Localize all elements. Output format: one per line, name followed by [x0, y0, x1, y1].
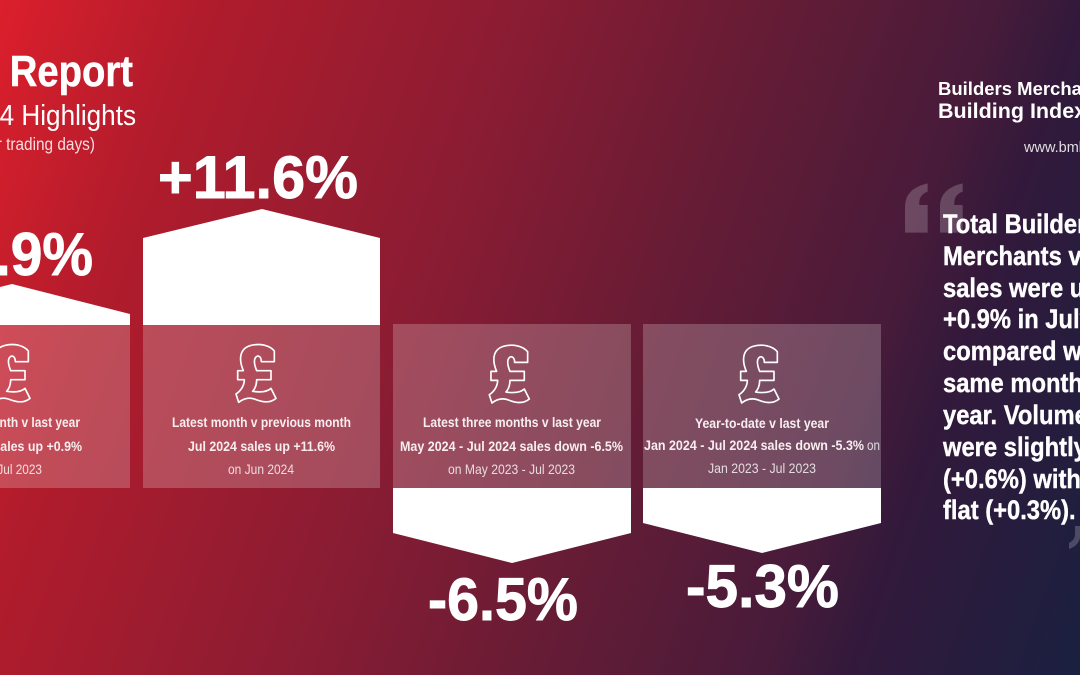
logo: builders merchants building index	[938, 78, 1080, 156]
card text: Latest three months v last year	[423, 414, 601, 430]
value: -6.5%: -6.5%	[428, 566, 578, 633]
value: -5.3%: -5.3%	[686, 553, 839, 620]
card text: on Jun 2024	[228, 461, 294, 477]
icon: pound	[739, 345, 779, 403]
card text	[400, 414, 623, 477]
up arrow shape	[0, 284, 130, 325]
card text	[0, 414, 82, 477]
icon: pound	[236, 345, 276, 402]
card text: on	[867, 437, 880, 453]
panel: year-to-date v last year	[643, 324, 881, 620]
card text: on May 2023 - Jul 2023	[448, 461, 575, 477]
card background	[143, 325, 380, 488]
icon: pound	[489, 345, 529, 403]
card text: Jan 2024 - Jul 2024 sales down -5.3%	[644, 437, 864, 453]
card text	[172, 414, 351, 477]
card text: Year-to-date v last year	[695, 415, 829, 431]
quote text: flat (+0.3%).	[943, 496, 1076, 525]
panel: latest three months v last year	[393, 324, 631, 633]
card background	[393, 324, 631, 488]
panel: latest month v previous month	[143, 144, 380, 488]
icon: opening quote mark	[905, 183, 963, 233]
card text: Jul 2024 sales up +11.6%	[188, 438, 335, 454]
value: +11.6%: +11.6%	[158, 144, 358, 211]
up arrow shape	[143, 209, 380, 325]
down arrow shape	[393, 488, 631, 563]
panel: latest month v last year	[0, 221, 130, 488]
card text: Latest month v previous month	[172, 414, 351, 430]
card text: Jan 2023 - Jul 2023	[708, 460, 816, 476]
icon: closing quote mark	[1069, 526, 1080, 549]
card text	[644, 415, 880, 476]
card background	[0, 325, 130, 488]
title block	[0, 47, 136, 154]
card background	[643, 324, 881, 488]
down arrow shape	[643, 488, 881, 553]
card text: May 2024 - Jul 2024 sales down -6.5%	[400, 438, 623, 454]
icon: pound	[0, 345, 30, 402]
quote text	[942, 210, 1080, 525]
